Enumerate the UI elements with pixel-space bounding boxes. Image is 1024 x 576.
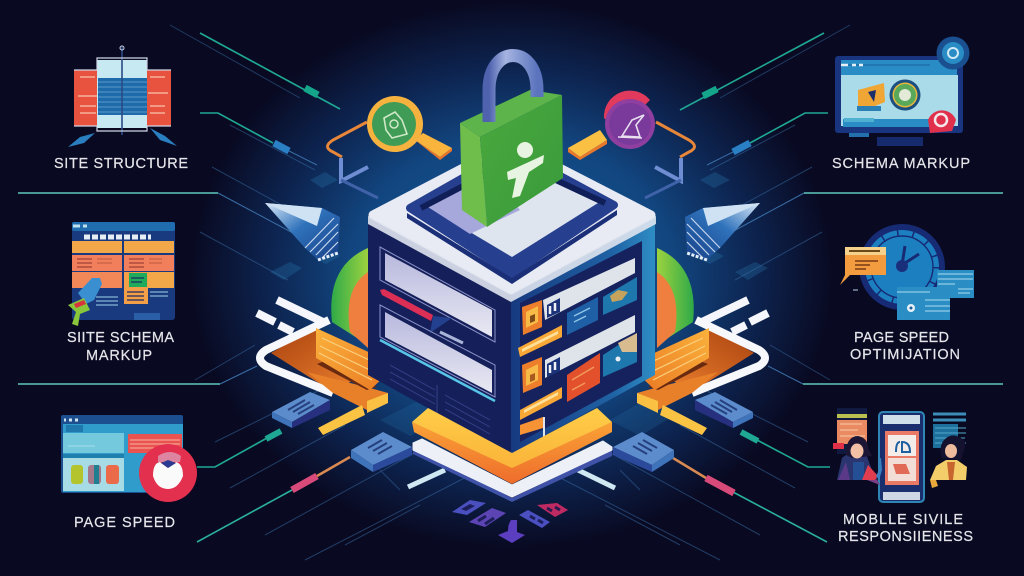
lock body side <box>460 123 487 227</box>
teal connector lines, right <box>673 33 1003 542</box>
label: siite schema markup <box>67 330 174 364</box>
left-face lower screen <box>380 305 495 397</box>
bottom white chevron <box>408 439 615 502</box>
teal connector lines, left <box>18 33 350 542</box>
icon: site structure blueprint <box>68 46 177 147</box>
icon: red speed badge <box>139 444 197 502</box>
orange frame link, right <box>645 122 694 198</box>
label: schema markup: SCHEMA MARKUP <box>832 156 970 172</box>
site structure section <box>54 46 188 172</box>
magnifier icon, green badge <box>367 96 452 160</box>
label: page speed: PAGE SPEED <box>74 515 175 531</box>
right-face row one <box>518 258 637 357</box>
icon: smartphone <box>879 412 924 502</box>
label: page speed optimijation <box>850 330 960 363</box>
cyan stripe <box>380 340 495 401</box>
icon: woman figure <box>837 436 882 485</box>
tray inner <box>428 163 598 257</box>
icon: speed gauge <box>840 224 974 320</box>
right navy panel <box>520 241 642 442</box>
icon: blue gear <box>936 36 970 70</box>
icon: monitor with badges <box>835 36 970 146</box>
icon: left screen panel <box>833 408 867 454</box>
lock body front <box>480 95 563 227</box>
icon: paper plane left <box>265 203 340 260</box>
page speed section <box>61 415 197 531</box>
label: site structure: SITE STRUCTURE <box>54 156 188 172</box>
label: siite schema markup: SIITE SCHEMA <box>67 330 174 346</box>
label: siite schema markup: MARKUP <box>86 348 152 364</box>
top edge shading <box>368 216 656 302</box>
floor blocks and down arrow <box>452 500 568 543</box>
central server cube <box>368 143 656 454</box>
cube left face <box>368 215 511 454</box>
label: page speed optimijation: OPTIMIJATION <box>850 347 960 363</box>
schema markup section <box>832 36 970 172</box>
speech callout <box>840 247 886 290</box>
icon: red badge <box>928 110 956 133</box>
data panel back <box>937 270 974 298</box>
cube right face <box>511 215 655 454</box>
side tray left <box>257 248 412 472</box>
icon: man figure <box>930 435 967 488</box>
padlock <box>460 56 563 227</box>
right-face row two <box>520 315 637 437</box>
label: moblle sivile responsiieness <box>838 512 973 545</box>
icon: puzzle tool <box>68 278 102 326</box>
page speed optimisation section <box>840 224 974 363</box>
icon: schema page layout <box>68 222 175 326</box>
icon: person on lock <box>507 142 544 198</box>
cube top <box>373 143 651 290</box>
lock body top <box>460 90 562 137</box>
left-face text lines <box>390 365 490 434</box>
floor tiles <box>270 172 768 436</box>
bottom orange chevron <box>412 408 612 484</box>
orange frame link, left <box>328 122 378 198</box>
icon: paper plane right <box>685 203 760 260</box>
label: page speed optimijation: PAGE SPEED <box>854 330 949 346</box>
left-face red bar <box>380 289 463 343</box>
purple and red badge icon <box>568 91 655 160</box>
icon: orange widget <box>857 83 885 111</box>
side tray right <box>613 248 768 472</box>
site schema markup section <box>67 222 175 364</box>
mobile style responsiveness section <box>833 408 973 545</box>
floor grid and circuit traces <box>170 25 850 560</box>
label: moblle sivile responsiieness: MOBLLE SIVILE <box>843 512 963 528</box>
icon: green ring <box>890 80 920 110</box>
lock shackle <box>489 56 537 122</box>
icon: browser window <box>61 415 197 502</box>
left-face upper screen <box>380 247 495 342</box>
label: moblle sivile responsiieness: RESPONSIIENESS <box>838 529 973 545</box>
icon: right screen panel <box>933 414 966 448</box>
data panel front <box>897 287 950 320</box>
tray ring on top <box>410 150 614 274</box>
